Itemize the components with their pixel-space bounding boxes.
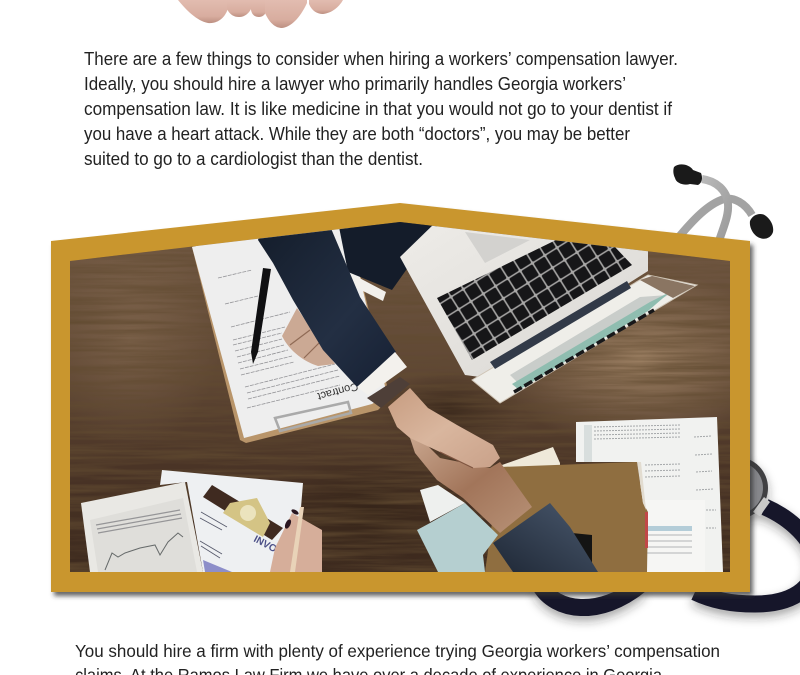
icon: stethoscope earpieces [673,164,773,244]
text block: intro paragraph: you have a heart attack. While they are both “doctors”, you may be better [84,123,630,144]
laptop screen [472,275,697,403]
photo: handshake over desk [70,222,730,572]
phone [572,533,592,563]
gold clipboard clip [203,485,283,540]
text block: closing paragraph: You should hire a firm with plenty of experience trying Georgia workers’ compensation [75,641,720,661]
contract label: Contract [316,380,359,402]
left hand fingers [282,308,335,366]
icon: fingertips at top of page [178,0,343,28]
tablet with chart [81,482,203,572]
invoice label: INVOI [252,534,281,557]
invoice paper [160,470,303,572]
text block: intro paragraph: suited to go to a cardiologist than the dentist. [84,148,423,169]
text block: intro paragraph: compensation law. It is like medicine in that you would not go to your dentist if [84,98,673,119]
handshake [388,388,532,533]
text block: closing paragraph [75,641,720,675]
documents right [576,417,723,572]
pen [251,268,271,364]
keyboard [437,240,632,360]
panel: house-shaped gold frame [51,203,750,592]
light blue papers [417,485,498,572]
contract on clipboard [192,212,390,443]
data table sheet [647,526,692,554]
text block: intro paragraph: Ideally, you should hire a lawyer who primarily handles Georgia workers’ [84,73,626,94]
right sleeve [493,503,598,572]
wooden desk [70,222,730,572]
folder [485,462,648,572]
slip of paper behind folder [502,447,560,467]
laptop [400,222,697,403]
text block: intro paragraph [84,48,678,169]
back sleeve [338,222,440,301]
icon: stethoscope tube and chest piece [540,457,800,608]
front sleeve with cuff and watch [258,226,410,408]
text block: intro paragraph: There are a few things to consider when hiring a workers’ compensation lawyer. [84,48,678,69]
writing hand [270,507,322,572]
